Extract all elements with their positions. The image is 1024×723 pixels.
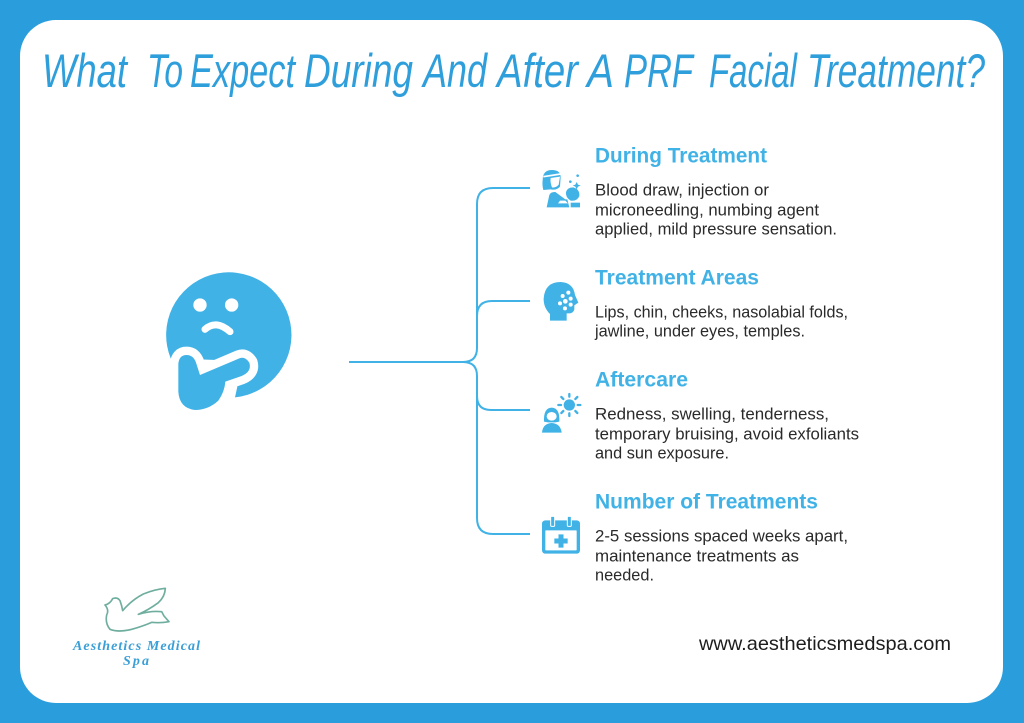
text: aftercare: and sun exposure. (595, 444, 729, 462)
text: number of treatments (595, 528, 848, 584)
title (42, 44, 985, 97)
text: treatment areas: jawline, under eyes, temples. (594, 322, 805, 340)
text: aftercare: temporary bruising, avoid exfoliants (595, 426, 859, 444)
text: aftercare: Redness, swelling, tenderness, (595, 406, 829, 424)
title: Facial (709, 44, 798, 97)
title: What (42, 44, 129, 97)
website url: www.aestheticsmedspa.com (698, 633, 951, 655)
text: during treatment (595, 182, 837, 238)
text: treatment areas (594, 304, 848, 340)
text: during treatment: Blood draw, injection or (595, 182, 770, 200)
text: treatment areas: Lips, chin, cheeks, nasolabial folds, (595, 304, 848, 322)
heading: treatment areas: Treatment Areas (595, 266, 759, 290)
heading: aftercare: Aftercare (595, 368, 688, 392)
logo: dove and name: Aesthetics Medical (72, 639, 200, 654)
text: during treatment: microneedling, numbing agent (595, 202, 819, 220)
icon: face with dots (544, 282, 578, 321)
heading: during treatment: During Treatment (595, 144, 767, 168)
icon: thinking face (166, 272, 291, 410)
title: After (495, 44, 580, 97)
icon: calendar (542, 516, 580, 554)
text: during treatment: applied, mild pressure sensation. (595, 220, 837, 238)
text: number of treatments: 2-5 sessions spaced weeks apart, (595, 528, 848, 546)
text: number of treatments: needed. (595, 566, 654, 584)
title: PRF (624, 44, 695, 97)
title: To (147, 44, 183, 97)
logo: dove and name: Spa (123, 654, 149, 669)
heading: number of treatments: Number of Treatments (595, 490, 818, 514)
icon: during treatment (542, 170, 581, 207)
title: During (304, 44, 413, 97)
title: Expect (190, 44, 296, 97)
title: And (421, 44, 488, 97)
icon: person and sun (542, 394, 580, 433)
text: aftercare (595, 406, 859, 462)
title: A (584, 44, 614, 97)
text: number of treatments: maintenance treatments as (595, 548, 799, 566)
logo: dove and name (72, 588, 200, 669)
connector lines (349, 188, 530, 534)
